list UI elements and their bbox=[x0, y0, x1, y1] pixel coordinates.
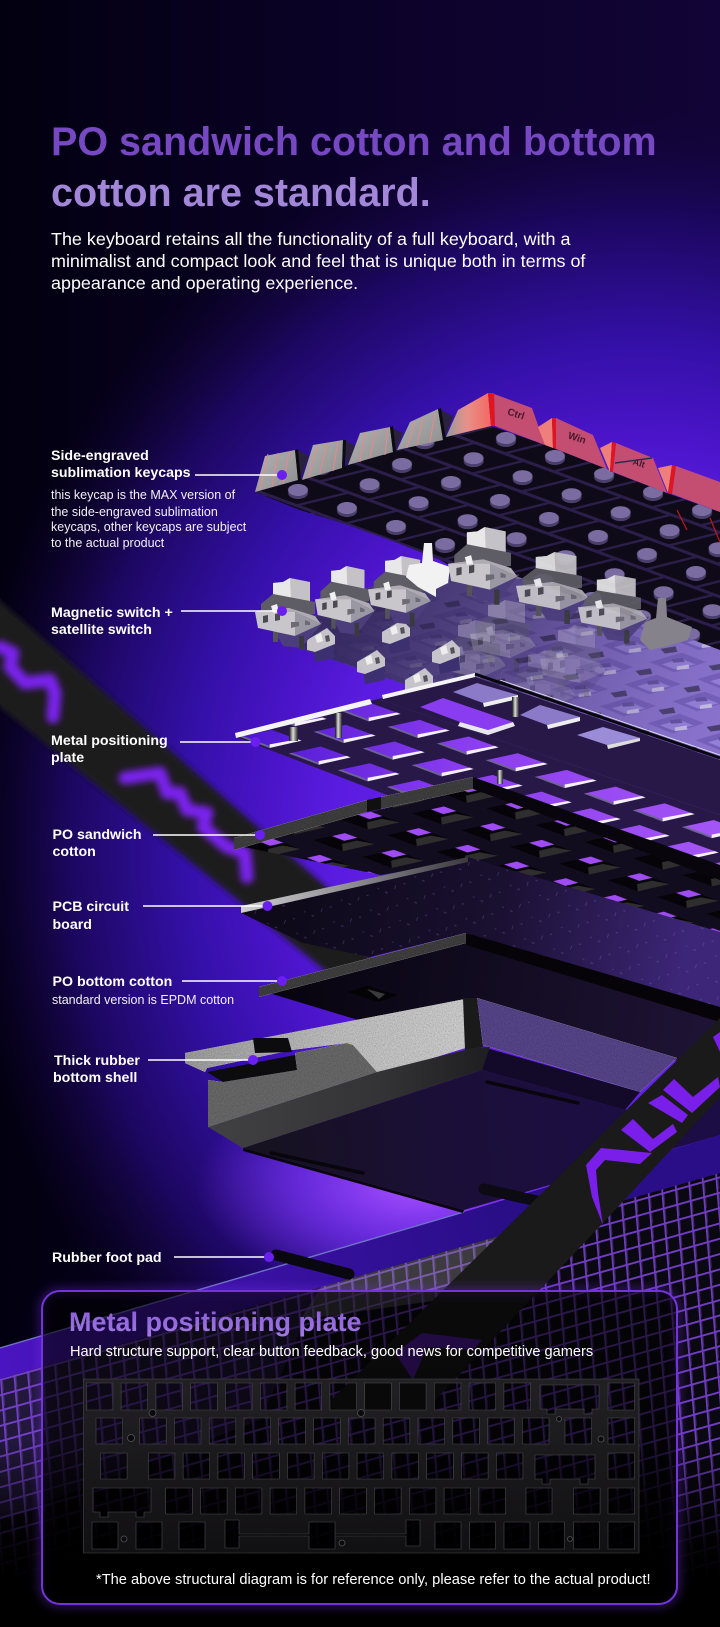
plate screw holes bbox=[121, 1410, 604, 1546]
large wide hole bbox=[420, 698, 513, 730]
intro paragraph: minimalist and compact look and feel that is unique both in terms of bbox=[51, 251, 586, 271]
thick rubber bottom shell bbox=[185, 998, 720, 1213]
bottom fade to black bbox=[0, 1440, 720, 1627]
label: bottom cotton bbox=[52, 974, 287, 1007]
intro paragraph bbox=[51, 229, 586, 293]
grey keycap 3 bbox=[348, 426, 403, 465]
desk surface and mesh bbox=[0, 1135, 720, 1627]
label: PCB: PCB circuit bbox=[52, 899, 129, 915]
switch bank, fading to lavender bbox=[300, 560, 720, 760]
mesh grille bbox=[0, 1173, 720, 1627]
rubber foot pads bbox=[276, 1189, 537, 1274]
label: sandwich cotton: PO sandwich bbox=[52, 827, 142, 843]
PO sandwich cotton bbox=[234, 777, 720, 960]
underside slots bbox=[271, 1082, 578, 1173]
right key bbox=[658, 465, 720, 542]
keycap layer bbox=[255, 393, 720, 720]
title: PO sandwich cotton and bottom bbox=[51, 120, 657, 164]
panel heading: Metal positioning plate bbox=[69, 1307, 362, 1337]
label: foot pad bbox=[52, 1250, 274, 1266]
plate diagram bbox=[84, 1379, 639, 1553]
label: magnetic switch: satellite switch bbox=[51, 622, 152, 638]
shell corner bbox=[463, 998, 483, 1050]
satellite stabilizer, grey bbox=[640, 598, 692, 650]
see-through top row holes bbox=[453, 683, 640, 749]
label: sandwich cotton bbox=[52, 827, 265, 860]
Win key bbox=[538, 418, 607, 469]
label: shell: bottom shell bbox=[53, 1070, 137, 1086]
label: shell: Thick rubber bbox=[54, 1053, 140, 1069]
grey keycap 2 bbox=[302, 440, 356, 480]
shell underside bbox=[243, 1070, 720, 1210]
PO bottom cotton bbox=[259, 933, 720, 1070]
mesh, lighter left section bbox=[300, 1236, 500, 1320]
panel subheading: Hard structure support, clear button feedback, good news for competitive gamers bbox=[70, 1344, 593, 1360]
label: foot pad: Rubber foot pad bbox=[52, 1250, 162, 1266]
shell light grey band bbox=[185, 999, 465, 1072]
Ctrl key bbox=[446, 393, 545, 445]
label: side-engraved keycaps: sublimation keycaps bbox=[51, 465, 191, 481]
PCB circuit board bbox=[241, 857, 720, 1012]
label: shell bbox=[53, 1053, 258, 1086]
Ctrl key: Ctrl bbox=[506, 407, 526, 423]
label: metal plate: plate bbox=[51, 750, 84, 766]
faint logo on lower strap bbox=[395, 1333, 482, 1380]
intro paragraph: The keyboard retains all the functionality of a full keyboard, with a bbox=[51, 229, 571, 249]
label: bottom cotton: standard version is EPDM cotton bbox=[52, 993, 234, 1007]
panel: metal positioning plate bbox=[42, 1291, 677, 1604]
label: side-engraved keycaps: Side-engraved bbox=[51, 448, 149, 464]
label: magnetic switch: Magnetic switch + bbox=[51, 605, 173, 621]
metal positioning plate bbox=[235, 673, 720, 950]
label: bottom cotton: PO bottom cotton bbox=[52, 974, 172, 990]
shell textured dark band bbox=[208, 1043, 377, 1127]
label: PCB: board bbox=[52, 917, 92, 933]
white front edges bbox=[235, 699, 372, 738]
label: side-engraved keycaps: to the actual product bbox=[51, 536, 165, 550]
label: sandwich cotton: cotton bbox=[52, 844, 96, 860]
label: side-engraved keycaps: the side-engraved sublimation bbox=[51, 505, 218, 519]
label: metal plate bbox=[51, 733, 260, 766]
title: cotton are standard. bbox=[51, 171, 431, 215]
grey keycap 4 bbox=[397, 408, 453, 450]
desk edge band bbox=[0, 1135, 720, 1379]
plate with key holes bbox=[236, 699, 720, 950]
Alt key bbox=[600, 442, 667, 493]
intro paragraph: appearance and operating experience. bbox=[51, 273, 358, 293]
label: side-engraved keycaps bbox=[51, 448, 287, 550]
label: PCB bbox=[52, 899, 272, 933]
blurred background strap with logo bbox=[0, 592, 370, 1000]
label: metal plate: Metal positioning bbox=[51, 733, 168, 749]
rear switches and clips bbox=[307, 600, 608, 722]
switch layer bbox=[255, 527, 720, 760]
shell smooth band bbox=[208, 1047, 490, 1148]
plate top band bbox=[378, 677, 720, 815]
title bbox=[51, 120, 657, 215]
keycap underside lattice bbox=[255, 426, 720, 720]
grey keycap 1 bbox=[255, 449, 309, 492]
shell latch bbox=[207, 1038, 297, 1082]
disclaimer note: *The above structural diagram is for reference only, please refer to the actual product! bbox=[96, 1572, 651, 1588]
foreground AULA strap bbox=[320, 1018, 720, 1411]
label: side-engraved keycaps: keycaps, other keycaps are subject bbox=[51, 520, 247, 534]
satellite stabilizer bbox=[406, 543, 450, 597]
Win key: Win bbox=[566, 431, 587, 447]
label: magnetic switch bbox=[51, 605, 287, 638]
label: side-engraved keycaps: this keycap is the MAX version of bbox=[51, 488, 236, 502]
mounting pillars bbox=[289, 697, 519, 784]
shell purple side bbox=[477, 998, 677, 1092]
Alt key: Alt bbox=[632, 457, 646, 470]
labels and callouts bbox=[51, 448, 287, 1266]
strap logo bbox=[586, 1032, 720, 1225]
front row switches bbox=[255, 527, 692, 650]
